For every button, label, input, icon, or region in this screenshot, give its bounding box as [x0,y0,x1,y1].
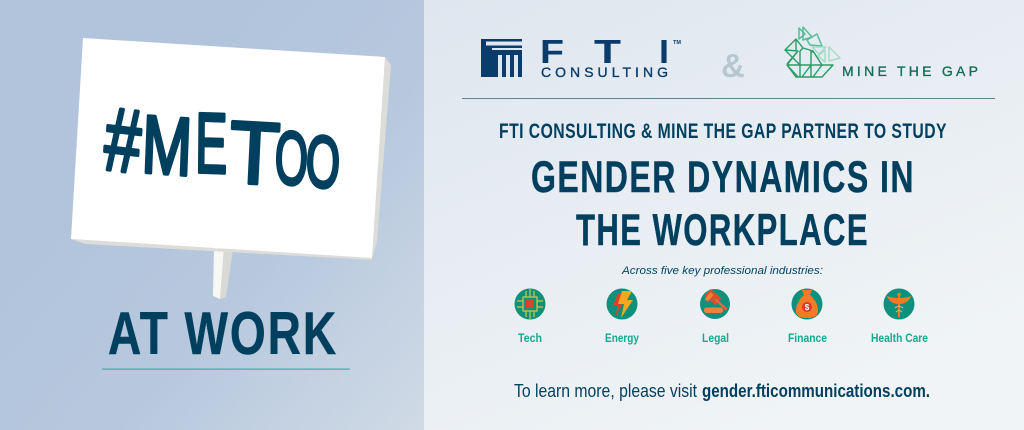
divider line [462,98,995,99]
label: Energy: Energy [605,331,639,345]
sign text: #METOO: O [304,120,343,203]
sign text: #METOO: T [227,102,282,204]
label: Finance: Finance [788,331,827,345]
logo: FTI Consulting [481,33,681,80]
logo: FTI Consulting: F [540,33,564,70]
label: Legal: Legal [702,331,729,345]
sign text: #METOO: E [195,96,228,192]
logo: FTI Consulting: T [594,33,621,70]
icon: finance money bag: $ [805,303,810,312]
heading: AT WORK: AT WORK [108,300,338,367]
sign text: #METOO: M [140,99,195,193]
call to action: To learn more, please visit [514,381,697,401]
icon: legal gavel [700,289,730,319]
icon: health care caduceus [884,288,914,320]
call to action [514,381,930,401]
call to action: gender.fticommunications.com. [702,381,930,401]
underline: AT WORK [102,368,350,370]
industries intro: Across five key professional industries: [621,265,823,277]
logo: Mine the Gap [785,27,978,79]
protest sign [71,38,391,299]
label: Health Care: Health Care [871,331,928,345]
logo: FTI Consulting: I [659,33,669,70]
title line 2: THE WORKPLACE [576,206,869,255]
logo: Mine the Gap: MINE THE GAP [842,63,978,79]
sign text: #METOO: # [101,89,146,192]
icon: finance money bag [792,288,822,320]
ampersand: & [721,47,745,84]
label: Tech: Tech [518,331,542,345]
sign text: #METOO: O [273,114,312,200]
logo: FTI Consulting: TM [673,40,681,46]
panel: left background [0,0,424,430]
icon: tech chip [514,288,546,320]
icon: energy bolt [606,288,638,320]
logo: FTI Consulting: CONSULTING [541,64,668,80]
panel: right background [424,0,1024,430]
